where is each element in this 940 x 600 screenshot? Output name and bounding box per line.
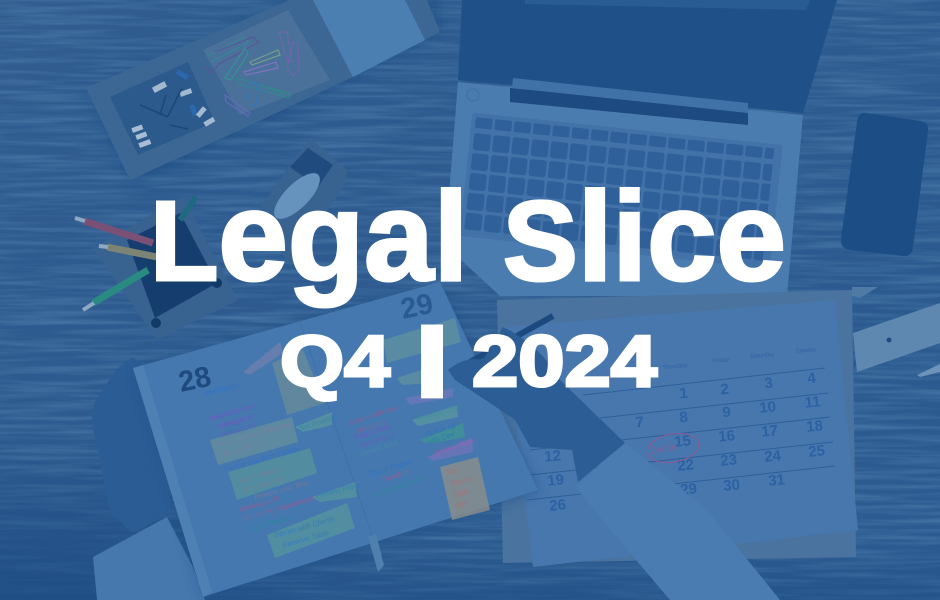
calendar dates: 25	[808, 442, 826, 461]
calendar dates: 1	[679, 385, 689, 402]
handwritten planner notes: Investors	[356, 417, 388, 435]
calendar page	[505, 300, 858, 567]
note paper	[313, 0, 425, 77]
handwritten planner notes: Reserve Table	[281, 528, 330, 550]
smartphone	[841, 113, 928, 256]
calendar dates: 2	[720, 381, 730, 398]
keyboard	[459, 113, 783, 269]
date numbers: 28	[176, 361, 214, 399]
right hand with pen and sleeve	[448, 316, 780, 600]
handwritten planner notes: Bacon	[449, 474, 472, 488]
handwritten planner notes: Yoga Classes	[245, 513, 292, 534]
pencil holder with pencils	[75, 197, 238, 340]
calendar dates: 10	[759, 398, 777, 417]
laptop	[445, 0, 837, 296]
handwritten planner notes: Prepare Docs	[416, 402, 463, 423]
handwritten planner notes: Deadline	[381, 466, 412, 484]
calendar dates: 15	[674, 432, 692, 451]
date numbers: 29	[398, 288, 436, 326]
subtitle: Q4 | 2024: |	[408, 310, 456, 398]
laptop base	[445, 82, 803, 296]
subtitle: Q4 | 2024: 2024	[472, 322, 657, 402]
calendar dates	[544, 370, 826, 515]
handwritten planner notes: Marketing Department	[241, 494, 316, 523]
handwritten planner notes: Review Plans	[315, 480, 362, 500]
handwritten planner notes: Eggs	[451, 486, 470, 499]
weekday labels: Thursday	[662, 363, 688, 371]
handwritten planner notes: Providers for	[242, 474, 286, 495]
calendar dates: 4	[807, 370, 817, 387]
calendar dates: 3	[764, 375, 774, 392]
handwritten planner notes: Follow up	[424, 420, 457, 439]
right sleeve	[575, 443, 780, 600]
handwritten planner notes: Update Plans	[431, 435, 477, 458]
calendar dates: 22	[677, 456, 695, 475]
calendar dates: 24	[764, 447, 782, 466]
handwritten planner notes: Meditation	[204, 380, 240, 398]
handwritten planner notes: Introduce new	[208, 401, 256, 423]
calendar dates: 31	[768, 471, 786, 490]
power button	[467, 89, 479, 101]
calendar dates: 29	[680, 480, 698, 499]
calendar dates: 12	[544, 447, 562, 466]
handwritten planner notes: Prepare new Milestone	[216, 419, 292, 449]
weekday labels	[662, 347, 816, 371]
weekday labels: Sunday	[796, 347, 816, 355]
handwritten planner notes: Finish Report	[368, 456, 414, 479]
left sleeve	[93, 517, 205, 600]
handwritten planner notes: Pickup Car from Dealer	[223, 444, 301, 474]
weekday labels: Saturday	[750, 352, 774, 360]
open planner	[133, 282, 540, 600]
calendar dates: 30	[723, 476, 741, 495]
calendar dates: 11	[804, 393, 821, 412]
calendar dates: 9	[722, 404, 732, 421]
tape dispenser	[255, 138, 347, 265]
circled doctor appointment	[645, 430, 701, 466]
push pins	[131, 69, 215, 148]
calendar dates: 8	[679, 409, 689, 426]
title: Legal Slice: Legal Slice	[150, 166, 786, 307]
handwritten planner notes: Manager to	[216, 412, 255, 431]
calendar dates: 18	[806, 417, 824, 436]
calendar dates: 17	[761, 422, 779, 441]
handwritten planner notes: Milk	[454, 498, 471, 510]
handwritten planner notes: Project Plan	[222, 439, 263, 459]
calendar dates: 19	[547, 471, 565, 490]
calendar dates: 23	[720, 451, 738, 470]
date numbers	[176, 288, 436, 399]
handwritten planner notes: Select Service	[235, 464, 284, 486]
calendar dates: 7	[635, 414, 645, 431]
paper clips	[205, 32, 299, 116]
subtitle: Q4 | 2024	[280, 310, 657, 402]
handwritten planner notes	[204, 380, 477, 550]
calendar dates: 16	[718, 427, 736, 446]
handwritten planner notes: Dinner with Clients	[273, 514, 336, 540]
right hand	[448, 327, 625, 482]
weekday labels: Friday	[712, 357, 729, 365]
circled doctor appointment: Doctor	[650, 442, 677, 456]
handwritten planner notes: Set Priorities	[298, 411, 341, 433]
calendar board	[497, 287, 878, 567]
handwritten planner notes: Review and Test	[253, 478, 309, 502]
handwritten planner notes: Meeting with	[238, 494, 281, 514]
handwritten planner notes: with Dev	[426, 429, 457, 447]
handwritten planner notes: Agent Appt	[357, 430, 397, 450]
handwritten planner notes: Real Estate	[353, 421, 393, 442]
bookmark ribbon	[368, 534, 384, 572]
handwritten planner notes: Swimming Pool	[371, 474, 423, 499]
laptop screen	[458, 0, 837, 113]
handwritten planner notes: Buy	[443, 465, 459, 477]
handwritten planner notes: colleagues	[220, 420, 257, 439]
subtitle: Q4 | 2024: Q4	[280, 322, 390, 402]
ruler	[853, 303, 940, 377]
handwritten planner notes: Dentist Appt	[358, 438, 400, 459]
hinge	[510, 88, 748, 125]
pen	[470, 316, 553, 362]
pencils	[75, 197, 196, 310]
left hand and sleeve	[92, 357, 205, 600]
sticky notes	[210, 318, 490, 558]
handwritten planner notes: Lunch with new	[348, 402, 400, 427]
calendar dates: 26	[549, 496, 567, 515]
desk tray with pins, clips and note paper	[86, 0, 440, 186]
